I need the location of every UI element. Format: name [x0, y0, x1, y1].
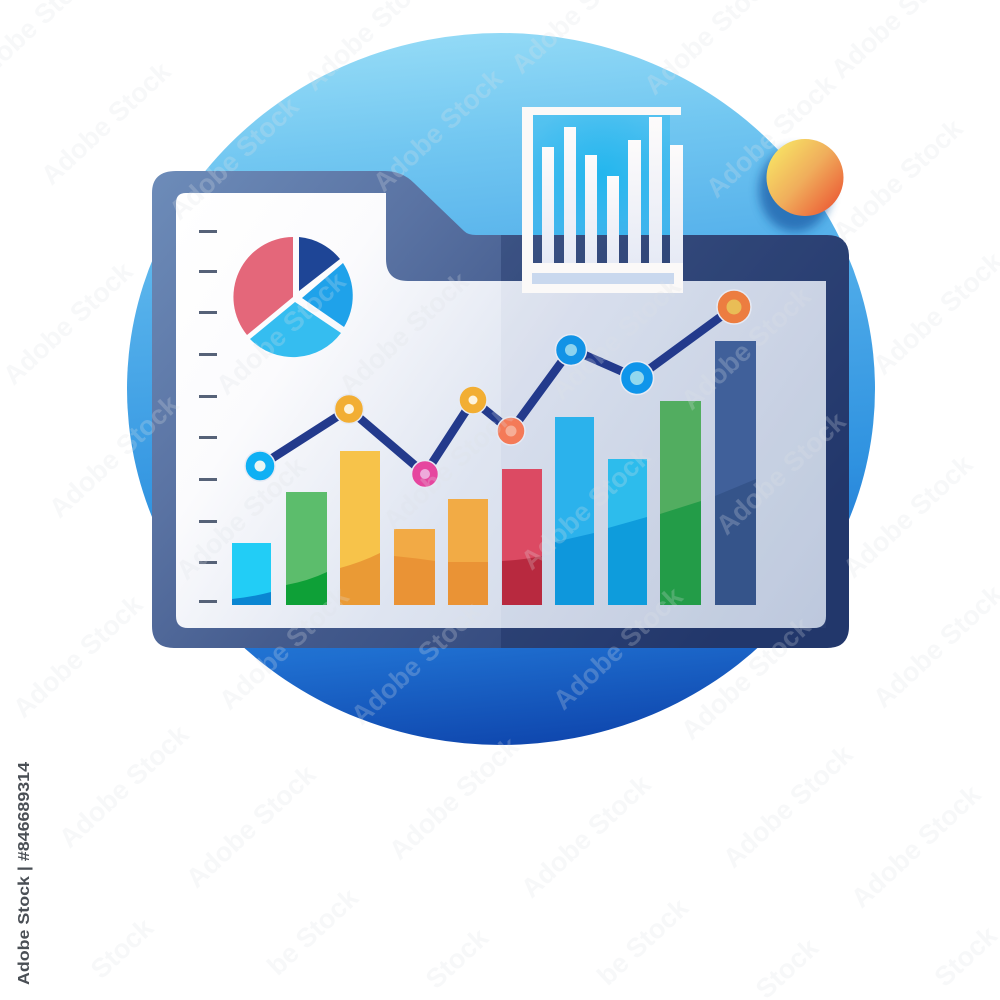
watermark pattern: Adobe Stock: [53, 719, 195, 854]
marker 3: [412, 460, 438, 488]
watermark pattern: Adobe Stock: [180, 759, 322, 894]
pie slice: red: [233, 237, 293, 335]
stock id caption: Adobe Stock | #846689314: [16, 762, 33, 985]
line markers: [245, 290, 751, 488]
watermark pattern: Adobe Stock: [827, 113, 969, 248]
watermark pattern: Adobe Stock: [845, 779, 987, 914]
watermark pattern: Adobe Stock: [545, 271, 687, 406]
watermark pattern: be Stock: [591, 892, 695, 991]
marker 8: [717, 290, 751, 324]
marker 4: [459, 386, 487, 414]
sun ball shadow: [759, 148, 831, 232]
watermark pattern: Adobe Stock: [333, 266, 475, 401]
pie chart: [233, 237, 353, 357]
watermark pattern: Stock: [420, 922, 495, 995]
watermark pattern: Stock: [85, 912, 160, 985]
mini chart footer band: [532, 273, 674, 284]
bar 4: [394, 529, 435, 605]
bar 10: [715, 341, 756, 605]
bar 6: [502, 469, 542, 605]
bar 3: [340, 451, 380, 605]
watermark pattern: Adobe Stock: [0, 256, 139, 391]
bar 2: [286, 492, 327, 605]
watermark pattern: Adobe Stock: [345, 596, 487, 731]
watermark pattern: Adobe Stock: [515, 441, 657, 576]
bar 8: [608, 459, 647, 605]
marker 6: [556, 334, 586, 366]
bar 9: [660, 401, 701, 605]
mini chart bars: [542, 117, 683, 263]
watermark pattern: Adobe Stock: [383, 731, 525, 866]
bar chart: [232, 341, 756, 605]
bar 5: [448, 499, 488, 605]
watermark pattern: Adobe Stock: [710, 406, 852, 541]
watermark pattern: Adobe Stock: [163, 91, 305, 226]
watermark pattern: Adobe Stock: [377, 401, 519, 536]
folder: [152, 171, 849, 648]
bar 1: [232, 543, 271, 605]
watermark pattern: Adobe Stock: [210, 266, 352, 401]
watermark pattern: Adobe Stock: [547, 581, 689, 716]
folder paper sheet: [176, 193, 826, 628]
watermark pattern: Adobe Stock: [675, 611, 817, 746]
marker 1: [245, 451, 275, 481]
watermark pattern: Adobe Stock: [837, 449, 979, 584]
orange sun ball: [766, 139, 844, 216]
mini chart frame: [522, 107, 683, 293]
watermark pattern: Adobe Stock: [700, 69, 842, 204]
watermark pattern: Adobe Stock: [367, 63, 509, 198]
watermark pattern: be Stock: [261, 882, 365, 981]
marker 5: [497, 417, 525, 445]
axis tick marks: [199, 230, 217, 603]
watermark pattern: Adobe Stock: [170, 451, 312, 586]
trend line: [260, 307, 734, 474]
watermark pattern: Adobe Stock: [717, 739, 859, 874]
watermark pattern: Adobe Stock: [35, 56, 177, 191]
watermark pattern: Adobe Stock: [675, 281, 817, 416]
pie slice: light blue: [250, 302, 341, 357]
background circle: [127, 33, 875, 745]
marker 2: [334, 394, 364, 424]
bar 7: [555, 417, 594, 605]
watermark pattern: Adobe Stock: [213, 581, 355, 716]
watermark pattern: Adobe Stock: [515, 769, 657, 904]
pie slice: blue: [302, 263, 353, 327]
mini bar chart card: [522, 107, 683, 293]
watermark pattern: Adobe Stock: [43, 389, 185, 524]
marker 7: [620, 362, 654, 394]
watermark pattern: Adobe Stock: [7, 589, 149, 724]
pie slice: navy: [299, 237, 340, 291]
